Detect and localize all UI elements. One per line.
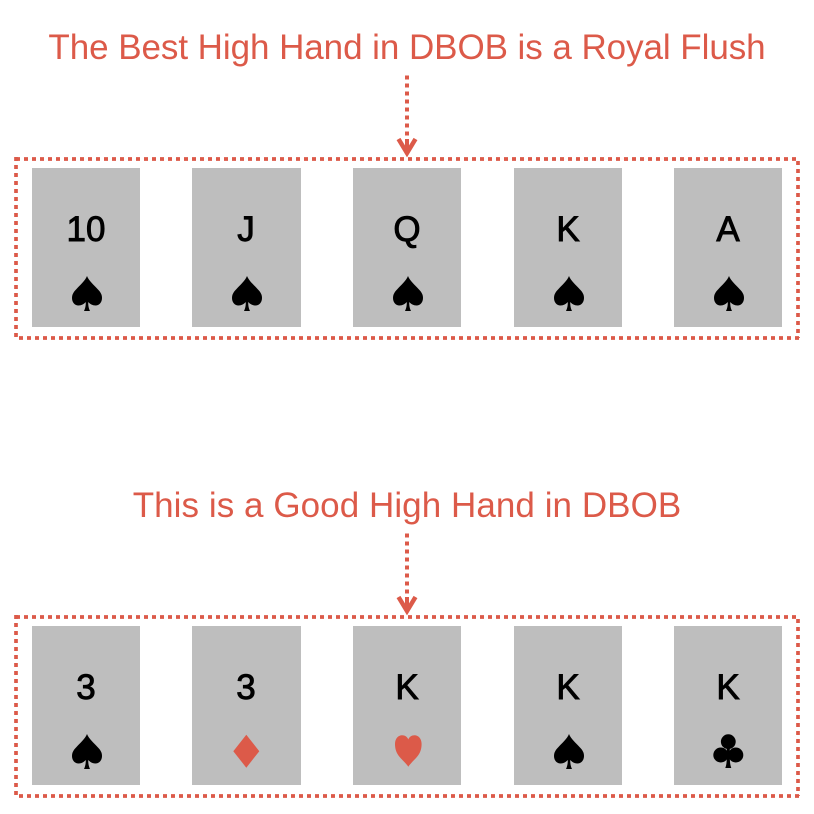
arrow: top [396, 76, 418, 158]
card: 3 of spades: 3 [76, 668, 96, 707]
arrow: bottom [396, 534, 418, 616]
card: A of spades [674, 168, 782, 327]
card: K of hearts: K [395, 668, 419, 707]
card: 3 of diamonds: 3 [236, 668, 256, 707]
card: Q of spades [353, 168, 461, 327]
title: royal flush: The Best High Hand in DBOB is a Royal Flush [48, 28, 766, 67]
card: K of spades: K [556, 210, 580, 249]
card: K of spades: K [556, 668, 580, 707]
card: K of spades [514, 168, 622, 327]
panel: royal flush hand [14, 157, 800, 340]
card: 10 of spades: 10 [67, 210, 105, 249]
title: good high hand: This is a Good High Hand in DBOB [133, 486, 681, 525]
card: J of spades: J [237, 210, 255, 249]
card: 3 of diamonds [192, 626, 301, 785]
panel: good hand [14, 615, 800, 798]
card: Q of spades: Q [393, 210, 421, 249]
card: J of spades [192, 168, 301, 327]
card: K of hearts [353, 626, 461, 785]
card: 3 of spades [32, 626, 140, 785]
card: K of clubs [674, 626, 782, 785]
card: K of spades [514, 626, 622, 785]
card: 10 of spades [32, 168, 140, 327]
card: K of clubs: K [716, 668, 740, 707]
card: A of spades: A [716, 210, 740, 249]
